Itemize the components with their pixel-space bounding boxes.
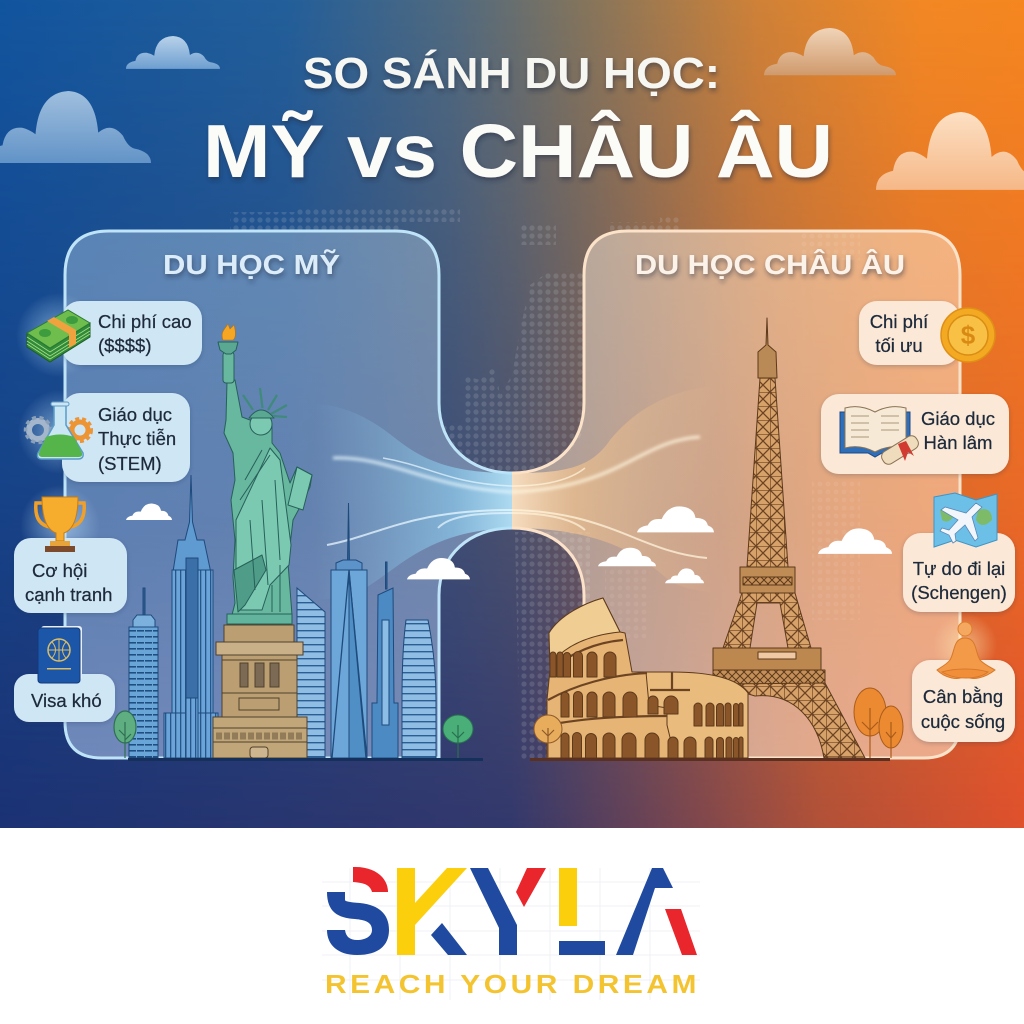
- cornice lines: [548, 640, 690, 723]
- label: cuộc sống: [921, 711, 1005, 732]
- letter K: [397, 868, 467, 955]
- Colosseum: [547, 598, 748, 758]
- building: left tower: [129, 588, 158, 758]
- pill: [14, 538, 127, 613]
- item: Tự do đi lại: [903, 493, 1015, 612]
- label: [911, 558, 1007, 603]
- label: [870, 311, 929, 356]
- pill: [903, 533, 1015, 612]
- building: Empire State: [164, 475, 218, 758]
- base plinth: [227, 614, 292, 624]
- background clouds: [0, 28, 1024, 190]
- logo grid: [322, 868, 700, 1000]
- label: (STEM): [98, 453, 162, 474]
- tree orange left: [534, 715, 562, 758]
- title: [203, 48, 833, 193]
- label: [921, 408, 995, 453]
- item: Chi phí cao: [16, 293, 202, 377]
- tagline: REACH YOUR DREAM: [325, 971, 700, 999]
- item: Giáo dục thực tiễn: [18, 390, 190, 482]
- label: Giáo dục: [921, 408, 995, 429]
- icon: passport: [38, 626, 82, 683]
- second platform: [740, 567, 795, 593]
- ground lines: [128, 758, 890, 761]
- first platform: [713, 648, 825, 685]
- label: cạnh tranh: [25, 584, 112, 605]
- pedestal: [213, 625, 307, 758]
- fan blue: [305, 403, 512, 600]
- panel heading right: DU HỌC CHÂU ÂU: [635, 249, 905, 280]
- pill: [14, 674, 115, 722]
- Statue of Liberty: [213, 324, 312, 758]
- foreground small clouds: [126, 504, 892, 583]
- fan orange: [512, 385, 725, 595]
- arches: [550, 652, 743, 758]
- label: [98, 404, 176, 474]
- pill: [62, 301, 202, 365]
- panel outline right: [512, 231, 960, 758]
- item: Cơ hội cạnh tranh: [14, 485, 127, 613]
- label: [25, 560, 112, 605]
- logo SKYLA: [322, 867, 700, 1000]
- item: Chi phí tối ưu: [859, 301, 995, 365]
- panel: du học Mỹ: [65, 231, 512, 758]
- icon: coin: $: [961, 320, 976, 350]
- letter Y: [470, 868, 546, 955]
- pill: [859, 301, 960, 365]
- label: Chi phí: [870, 311, 929, 332]
- title line 2: MỸ vs CHÂU ÂU: [203, 109, 833, 193]
- label: Visa khó: [31, 690, 102, 711]
- stream lines orange: [512, 437, 707, 558]
- upper tower: [747, 378, 788, 567]
- statue figure: [218, 342, 312, 615]
- New York skyline: [129, 475, 436, 758]
- spire and top: [758, 318, 777, 378]
- label: Hàn lâm: [924, 432, 992, 453]
- label: Chi phí cao: [98, 311, 192, 332]
- building: slanted glass tower: [297, 588, 325, 758]
- label: [921, 686, 1005, 732]
- label: Thực tiễn: [98, 428, 176, 449]
- dotted world map: [220, 200, 870, 760]
- pill: [912, 660, 1015, 742]
- icon: trophy: [36, 497, 84, 552]
- icon: money stack: [27, 310, 90, 362]
- trees left panel: [114, 711, 473, 758]
- Eiffel Tower: [713, 318, 865, 758]
- panel fill right: [512, 231, 960, 758]
- letter L: [559, 868, 605, 955]
- middle section: [723, 593, 811, 648]
- panel outline left: [65, 231, 512, 758]
- building: One World Trade: [331, 503, 367, 758]
- stream lines blue: [327, 458, 512, 545]
- letter S: [327, 867, 389, 955]
- panel: du học Châu Âu: [512, 231, 960, 758]
- label: Cân bằng: [923, 686, 1003, 707]
- icon: flask and gears: [26, 402, 92, 459]
- panel heading left: DU HỌC MỸ: [163, 249, 340, 280]
- pill: [821, 394, 1009, 474]
- label: Tự do đi lại: [913, 558, 1005, 579]
- panel fill left: [65, 231, 512, 758]
- rear section: [645, 672, 748, 758]
- title line 1: SO SÁNH DU HỌC:: [303, 48, 720, 98]
- building: right tower: [402, 620, 436, 758]
- icon: meditation: [937, 622, 995, 678]
- letter A: [616, 868, 697, 955]
- pill: [62, 393, 190, 482]
- item: Cân bằng cuộc sống: [912, 613, 1015, 742]
- main wall: [547, 598, 675, 758]
- tree green left: [114, 711, 136, 758]
- icon: map with plane: [934, 493, 997, 547]
- item: Visa khó: [14, 626, 115, 722]
- tree orange right large: [854, 688, 886, 758]
- label: Giáo dục: [98, 404, 172, 425]
- label: ($$$$): [98, 335, 151, 356]
- torch flame: [222, 324, 235, 340]
- label: tối ưu: [875, 335, 923, 356]
- building: slim tower: [372, 562, 398, 758]
- label: [98, 311, 192, 356]
- right leg: [715, 683, 865, 758]
- label: (Schengen): [911, 582, 1007, 603]
- label: Cơ hội: [32, 560, 87, 581]
- upper wall band: [549, 598, 620, 665]
- tree orange right small: [879, 706, 903, 758]
- item: Giáo dục Hàn lâm: [821, 394, 1009, 474]
- flowing light streams: [305, 385, 725, 600]
- trees right panel: [534, 688, 903, 758]
- icon: book and diploma: [840, 407, 921, 467]
- tree green right: [443, 715, 473, 758]
